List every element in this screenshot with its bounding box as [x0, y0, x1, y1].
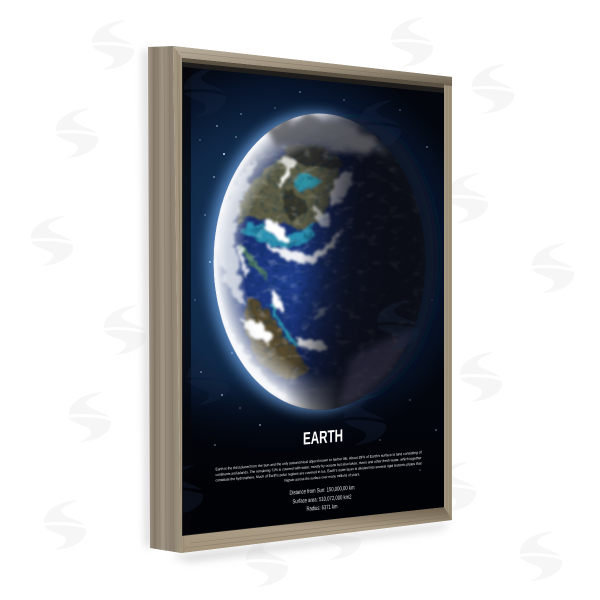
- poster: [183, 67, 444, 535]
- ocean: [213, 114, 355, 410]
- poster planet facts: Distance from Sun: 150,000,00 km: [289, 485, 355, 497]
- central america: [240, 243, 268, 282]
- frame inner rebate: [182, 58, 444, 536]
- poster planet facts: Radius: 6371 km: [306, 504, 338, 513]
- poster planet facts: Surface area: 510,072,000 km2: [292, 495, 352, 505]
- frame drop shadow: [143, 50, 452, 562]
- poster space background: [183, 67, 444, 535]
- frame top rail: [173, 46, 452, 86]
- frame rebate top highlight: [182, 58, 444, 88]
- wooden frame: [148, 46, 452, 553]
- poster description paragraph: [216, 450, 422, 483]
- upper polar cloud cap: [267, 118, 387, 152]
- poster faint watermarks: [183, 70, 416, 513]
- north america landmass: [235, 153, 340, 230]
- poster planet facts: [290, 485, 354, 513]
- left limb cloud band: [217, 157, 257, 307]
- atmosphere glow: [199, 104, 378, 421]
- deep space blue haze: [183, 67, 444, 537]
- poster description paragraph: constitute the hydrosphere. Much of Earth's polar regions are covered in ice. Earth's outer layer is divided into several rigid tectonic plates that: [216, 461, 422, 483]
- poster title: EARTH: [303, 425, 343, 449]
- right side glow suppression: [331, 112, 433, 404]
- poster lower fade: [191, 393, 444, 515]
- dark noise texture: [232, 149, 335, 374]
- south america landmass: [244, 297, 308, 379]
- stars: [194, 91, 437, 475]
- frame side face: [148, 46, 181, 553]
- cloud masses: [217, 157, 353, 397]
- gulf shallow teal: [240, 223, 315, 247]
- northern dark land: [280, 143, 343, 169]
- planet earth: [213, 114, 425, 410]
- poster description paragraph: migrate across the surface over many millions of years.: [284, 472, 360, 483]
- inland dark forest: [283, 187, 307, 220]
- frame front face: [173, 46, 452, 553]
- bright sunlit limb: [214, 114, 380, 410]
- frame bottom rail: [181, 507, 452, 553]
- night side shadow: [286, 114, 426, 410]
- poster description paragraph: continents and islands. The remaining 71% is covered with water, mostly by oceans but also lakes, rivers and other fresh water, which together: [216, 456, 422, 477]
- landmasses: [235, 143, 343, 379]
- night side faint cloud texture: [336, 168, 418, 336]
- lower right haze: [341, 332, 410, 405]
- poster left shadow strip: [183, 83, 191, 416]
- south america coastal teal: [268, 303, 297, 348]
- frame wood grain: [153, 46, 452, 552]
- noise clouds: [214, 114, 418, 390]
- poster description paragraph: Earth is the third planet from the Sun and the only astronomical object known to harbor life. About 29% of Earth's surface is land consisting of: [216, 450, 422, 472]
- hudson bay: [295, 174, 322, 191]
